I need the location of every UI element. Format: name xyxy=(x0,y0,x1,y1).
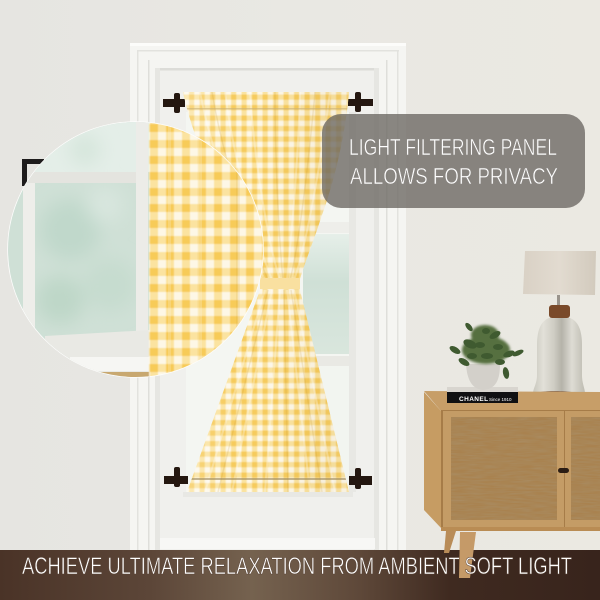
table lamp xyxy=(523,251,596,402)
callout text: ALLOWS FOR PRIVACY xyxy=(350,163,558,189)
book: Since 1910 xyxy=(489,397,512,402)
top curtain rod xyxy=(163,92,373,113)
lamp shade xyxy=(523,251,596,295)
wall picture frame corner behind circle xyxy=(22,159,44,186)
window glass and mullions xyxy=(183,112,356,497)
magnifier circle: fabric detail xyxy=(8,120,265,380)
magnified gingham xyxy=(149,120,265,380)
callout panel xyxy=(322,114,585,208)
callout text xyxy=(349,134,558,189)
magnified window view xyxy=(8,122,150,380)
door knobs xyxy=(558,468,569,473)
curtain tieback xyxy=(260,278,300,289)
floor xyxy=(0,550,600,600)
left door xyxy=(443,411,564,527)
legs xyxy=(444,531,456,553)
sideboard cabinet xyxy=(424,391,600,578)
lamp glass base xyxy=(533,318,585,394)
bottom curtain rod xyxy=(164,467,372,489)
gingham door curtain xyxy=(183,92,349,492)
book xyxy=(447,387,518,403)
book: CHANEL xyxy=(459,396,488,403)
door frame xyxy=(130,43,406,551)
plant in pot xyxy=(448,322,524,390)
right door xyxy=(565,411,600,527)
